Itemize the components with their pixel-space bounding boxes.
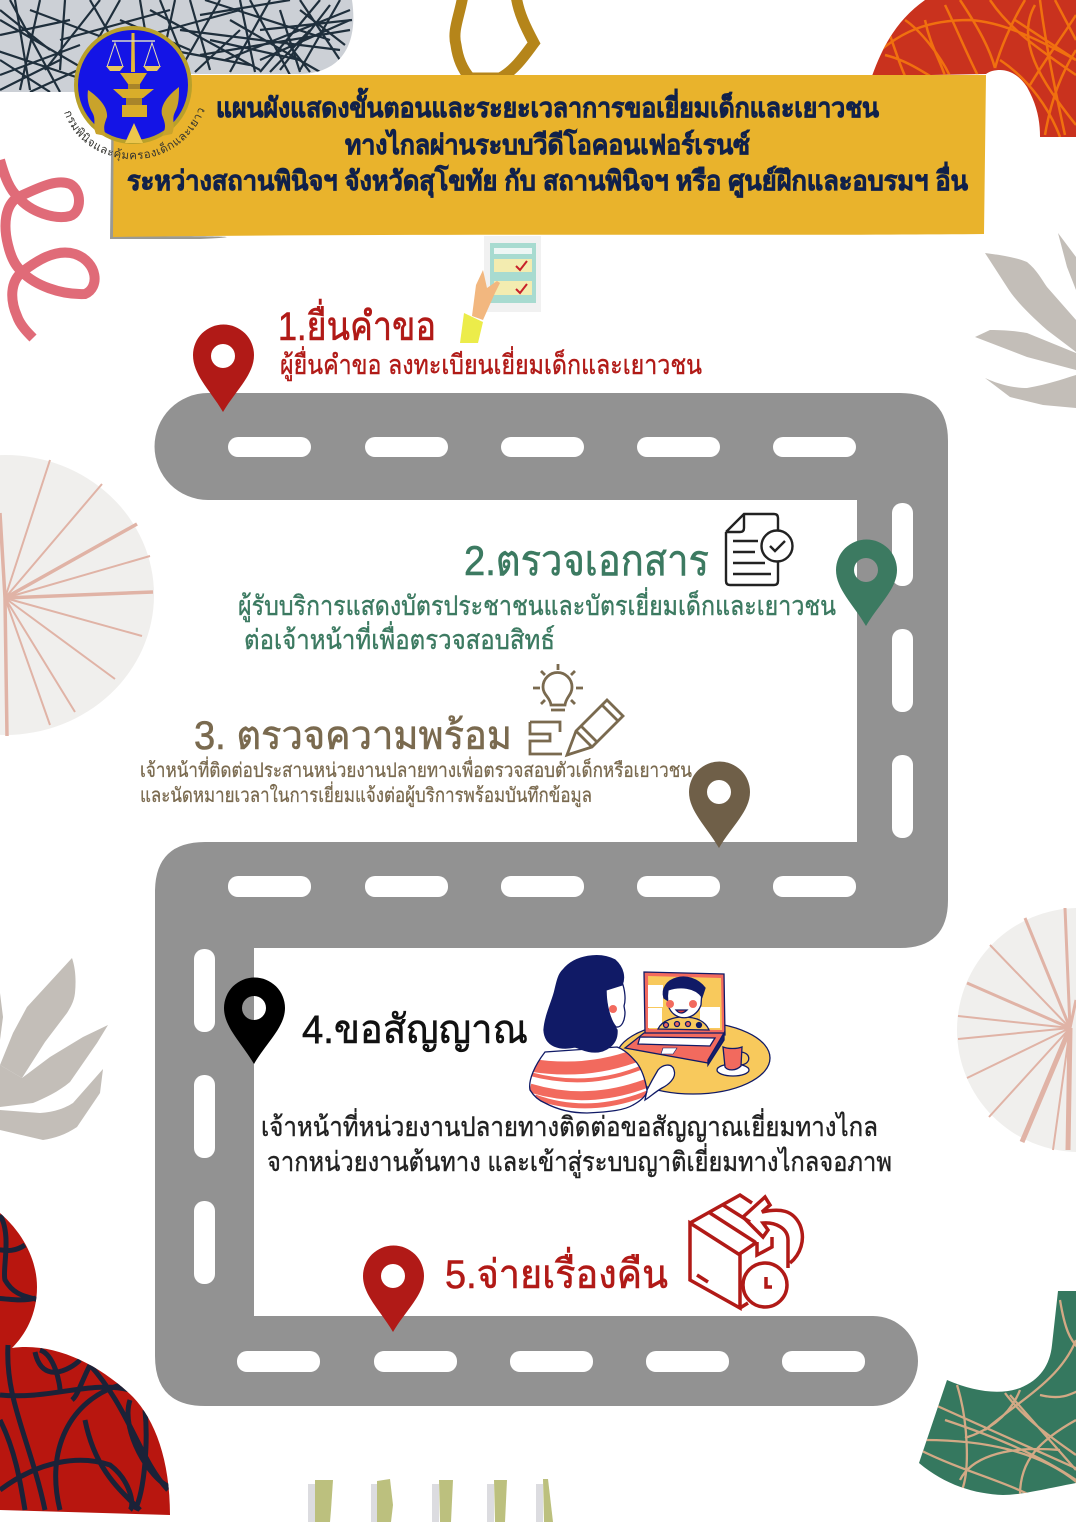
pin 2 xyxy=(836,540,897,626)
step 3 description: และนัดหมายเวลาในการเยี่ยมแจ้งต่อผู้บริการพร้อมบันทึกข้อมูล xyxy=(140,781,592,808)
road xyxy=(155,393,948,1406)
decoration: green scribble shape bottom right xyxy=(915,1285,1076,1500)
decoration: grey leaf left xyxy=(0,958,108,1140)
icon: document check xyxy=(726,514,792,585)
step 4 description: เจ้าหน้าที่หน่วยงานปลายทางติดต่อขอสัญญาณเยี่ยมทางไกล xyxy=(261,1108,878,1142)
emblem xyxy=(64,26,204,162)
step 3 description: เจ้าหน้าที่ติดต่อประสานหน่วยงานปลายทางเพื่อตรวจสอบตัวเด็กหรือเยาวชน xyxy=(140,756,692,782)
step 2 heading: 2.ตรวจเอกสาร xyxy=(464,537,709,584)
pin 1 xyxy=(193,324,254,412)
icon: light bulb and pencil xyxy=(530,664,623,755)
step 4 heading: 4.ขอสัญญาณ xyxy=(302,1008,528,1052)
decoration: bottom olive strokes xyxy=(308,1479,553,1522)
decoration: sunburst circle left xyxy=(0,455,154,736)
icon: return box with clock xyxy=(690,1195,802,1308)
step 2 description: ต่อเจ้าหน้าที่เพื่อตรวจสอบสิทธ์ xyxy=(244,621,555,655)
pin 4 xyxy=(224,977,285,1064)
step 5 heading: 5.จ่ายเรื่องคืน xyxy=(445,1247,668,1297)
step 4 description xyxy=(261,1108,892,1178)
icon: checklist with hand xyxy=(460,236,541,343)
decoration: red scribble shape bottom left xyxy=(0,1205,175,1520)
decoration: sunburst circle right xyxy=(957,908,1076,1152)
decoration: orange-red scribble shape top right xyxy=(865,0,1076,140)
decoration: grey scribble blob top left xyxy=(0,0,360,95)
pin 3 xyxy=(689,761,750,848)
step 2 description: ผู้รับบริการแสดงบัตรประชาชนและบัตรเยี่ยมเด็กและเยาวชน xyxy=(238,587,836,622)
pin 5 xyxy=(363,1245,424,1332)
decoration: pink ribbon xyxy=(0,160,95,338)
step 4 description: จากหน่วยงานต้นทาง และเข้าสู่ระบบญาติเยี่ยมทางไกลจอภาพ xyxy=(267,1143,892,1178)
illustration: woman on video call xyxy=(525,956,770,1120)
decoration: gold loop top xyxy=(455,0,534,78)
title line 2: ทางไกลผ่านระบบวีดีโอคอนเฟอร์เรนซ์ xyxy=(345,128,750,160)
step 1 description: ผู้ยื่นคำขอ ลงทะเบียนเยี่ยมเด็กและเยาวชน xyxy=(280,346,702,381)
title line 3: ระหว่างสถานพินิจฯ จังหวัดสุโขทัย กับ สถานพินิจฯ หรือ ศูนย์ฝึกและอบรมฯ อื่น xyxy=(127,161,969,198)
title line 1: แผนผังแสดงขั้นตอนและระยะเวลาการขอเยี่ยมเด็กและเยาวชน xyxy=(216,87,879,123)
step 1 heading: 1.ยื่นคำขอ xyxy=(278,299,436,349)
step 3 description xyxy=(140,756,692,808)
step 3 heading: 3. ตรวจความพร้อม xyxy=(194,714,512,758)
step 2 description xyxy=(238,587,836,655)
title banner xyxy=(110,75,986,239)
decoration: grey leaf right xyxy=(975,233,1076,408)
